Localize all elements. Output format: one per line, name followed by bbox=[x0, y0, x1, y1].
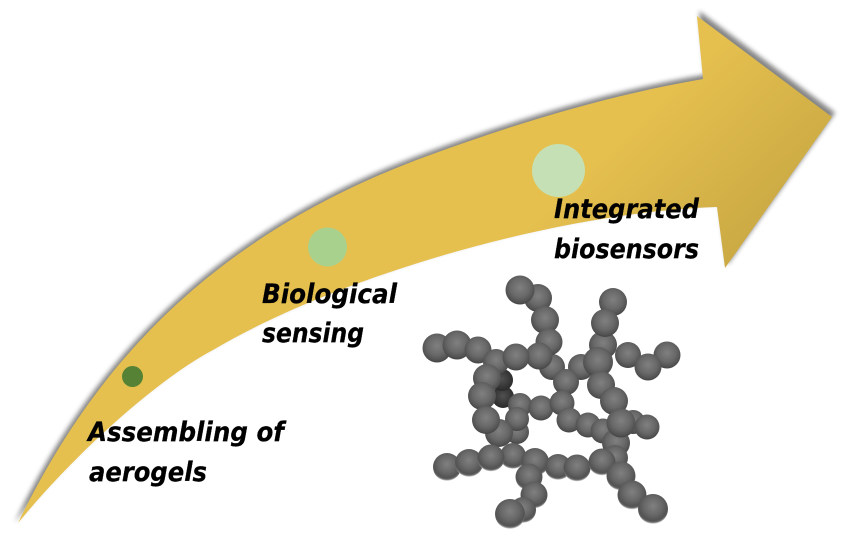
label: integrated biosensors: Integrated bbox=[554, 194, 700, 225]
label: assembling of aerogels bbox=[86, 417, 287, 488]
label: assembling of aerogels: aerogels bbox=[89, 457, 207, 488]
marker: integrated biosensors stage dot bbox=[532, 144, 585, 197]
illustration: aerogel sphere network bbox=[422, 276, 680, 529]
label: biological sensing: sensing bbox=[262, 318, 364, 349]
label: integrated biosensors bbox=[554, 194, 700, 265]
label: assembling of aerogels: Assembling of bbox=[86, 417, 287, 448]
marker: biological sensing stage dot bbox=[308, 228, 347, 266]
marker: assembling stage dot bbox=[122, 366, 143, 387]
label: biological sensing bbox=[262, 279, 398, 349]
label: integrated biosensors: biosensors bbox=[554, 234, 699, 265]
label: biological sensing: Biological bbox=[262, 279, 398, 310]
